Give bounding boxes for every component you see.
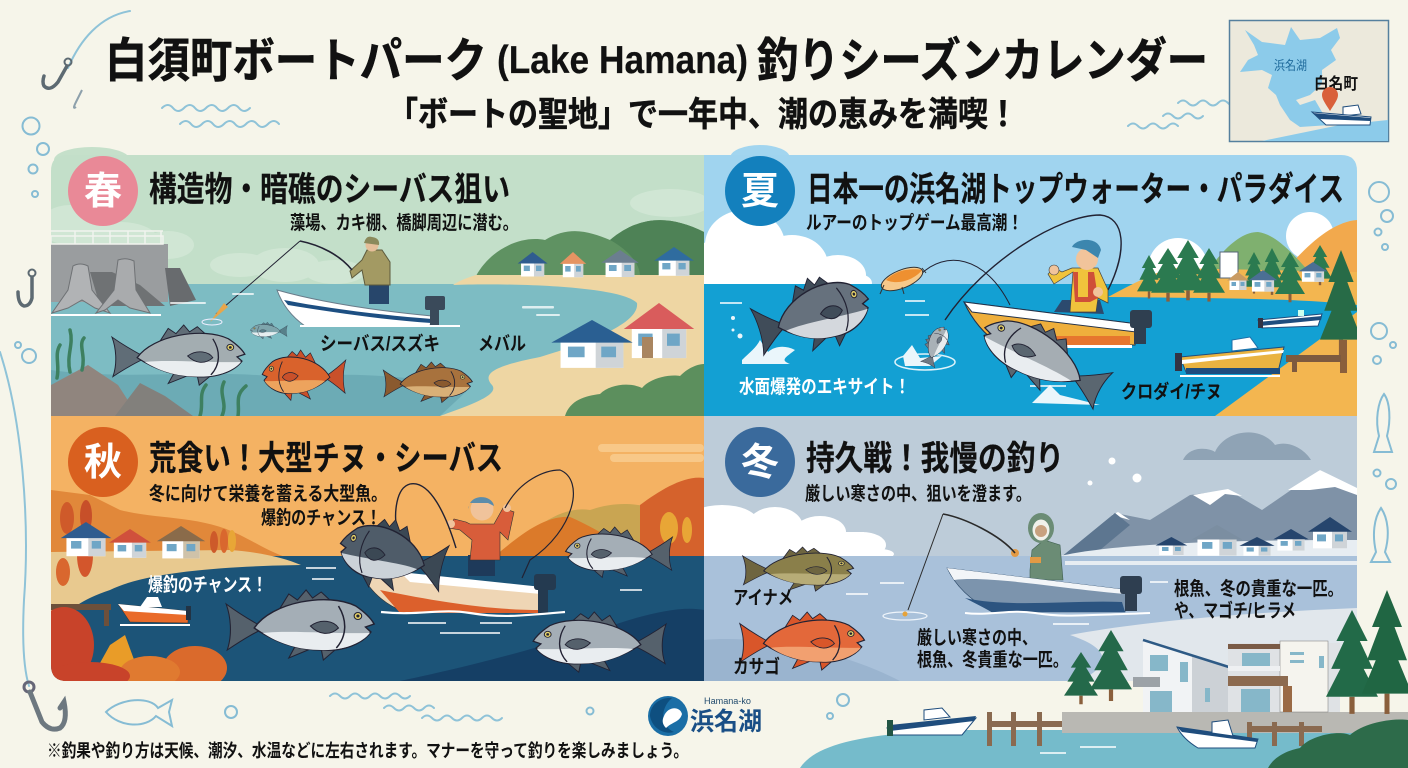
summer small boats	[1175, 310, 1322, 377]
subtitle: 「ボートの聖地」で一年中、潮の恵みを満喫！	[388, 96, 1018, 134]
summer suns	[1150, 212, 1332, 274]
quay	[1062, 712, 1408, 733]
title: 白須町ボートパーク	[105, 34, 487, 87]
spring boat	[277, 290, 460, 327]
winter water	[704, 556, 1357, 681]
spring water	[51, 284, 638, 416]
winter mountains	[1060, 470, 1357, 558]
title: 釣りシーズンカレンダー	[757, 34, 1208, 87]
summer forest	[1137, 240, 1332, 302]
summer small fish	[916, 322, 955, 370]
summer big tree	[1286, 250, 1362, 373]
autumn season badge: 秋	[84, 442, 122, 484]
summer label excite: 水面爆発のエキサイト！	[739, 376, 910, 398]
panel bumps	[54, 145, 790, 173]
map pin	[1322, 87, 1338, 111]
map inset	[1230, 20, 1388, 142]
autumn season badge	[68, 427, 138, 497]
autumn water	[51, 556, 704, 681]
tetrapods	[52, 264, 110, 313]
modern house	[1133, 640, 1340, 712]
logo small text: Hamana-ko	[704, 696, 751, 706]
summer text: ルアーのトップゲーム最高潮！	[806, 212, 1023, 234]
autumn houses	[61, 522, 205, 558]
spring hills	[476, 220, 704, 276]
wave decoration top left	[162, 105, 279, 127]
winter snow field and houses	[1060, 517, 1357, 560]
spring season badge	[68, 156, 138, 226]
bottom water highlights	[1040, 746, 1116, 754]
map label town: 白名町	[1314, 75, 1358, 93]
snow dots	[1088, 458, 1142, 486]
spring bush	[565, 364, 704, 416]
bottom land	[1062, 681, 1408, 768]
autumn foliage foreground	[34, 607, 227, 690]
title: (Lake Hamana)	[497, 39, 748, 82]
map label lake: 浜名湖	[1274, 58, 1307, 73]
logo name: 浜名湖	[690, 708, 762, 736]
winter text centre	[917, 626, 1068, 671]
panel: seasons	[34, 155, 1362, 690]
spring angler	[202, 237, 390, 325]
title	[105, 34, 1208, 87]
winter season badge: 冬	[741, 442, 779, 484]
autumn black sea bream	[333, 509, 452, 602]
waves bottom	[330, 694, 502, 720]
bottom shore scene	[800, 590, 1408, 768]
autumn hills trees right	[660, 512, 692, 544]
spring rockfish	[262, 350, 346, 400]
spring water highlights	[170, 293, 560, 316]
winter text right: 根魚、冬の貴重な一匹。	[1174, 577, 1343, 600]
winter text: 厳しい寒さの中、狙いを澄ます。	[805, 482, 1031, 505]
summer town	[1220, 252, 1327, 292]
winter label kasago: カサゴ	[733, 655, 780, 678]
spring brown rockfish	[383, 362, 472, 403]
autumn angler	[396, 470, 573, 578]
spring clouds	[40, 189, 710, 284]
winter label ainame: アイナメ	[733, 588, 793, 609]
summer water	[704, 284, 1357, 416]
panel: autumn	[34, 416, 704, 690]
summer splash left	[731, 316, 795, 364]
fish outline right lower	[1371, 508, 1390, 562]
map boat	[1312, 105, 1371, 125]
spring label sea bass: シーバス/スズキ	[320, 332, 440, 355]
autumn text line 1: 冬に向けて栄養を蓄える大型魚。	[149, 482, 387, 505]
fishing line and hook, top left	[43, 11, 130, 108]
summer cloud	[704, 212, 872, 284]
autumn hills left	[51, 490, 295, 570]
spring text: 藻場、カキ棚、橋脚周辺に潜む。	[290, 212, 518, 234]
bubbles right	[1369, 182, 1396, 489]
dock left	[987, 712, 1062, 746]
panel: summer	[694, 155, 1362, 418]
spring seaweed	[57, 330, 246, 416]
summer black sea bream	[747, 264, 878, 366]
bottom bush	[1268, 720, 1408, 768]
fish outline bottom left	[106, 700, 172, 726]
spring label mebaru: メバル	[478, 333, 526, 355]
autumn heading: 荒食い！大型チヌ・シーバス	[149, 440, 503, 478]
summer hills	[1214, 220, 1357, 272]
summer rod and line	[920, 215, 1121, 320]
panel: winter	[686, 416, 1357, 681]
autumn clouds	[598, 444, 704, 462]
summer water highlights	[720, 300, 1066, 387]
spring far houses	[518, 247, 694, 277]
bottom water	[800, 730, 1408, 768]
long line with big hook	[0, 352, 65, 729]
spring season badge: 春	[84, 171, 122, 213]
spring bait fish	[250, 322, 287, 339]
winter grey cloud	[1183, 432, 1311, 460]
winter boat	[947, 568, 1150, 616]
winter cloud left	[686, 505, 894, 559]
summer land	[1108, 268, 1357, 305]
winter text centre: 厳しい寒さの中、	[917, 626, 1037, 649]
winter angler	[883, 513, 1063, 620]
autumn dock	[51, 604, 111, 626]
autumn text line 2: 爆釣のチャンス！	[261, 507, 381, 529]
spring sand	[440, 275, 704, 416]
summer sea bass	[970, 300, 1118, 418]
autumn trees	[56, 500, 236, 586]
winter text centre: 根魚、冬貴重な一匹。	[917, 648, 1068, 671]
shore trees	[1064, 590, 1408, 714]
spring heading: 構造物・暗礁のシーバス狙い	[149, 171, 510, 209]
spring near houses	[551, 303, 694, 368]
summer splash centre	[895, 345, 955, 370]
bubbles bottom	[225, 694, 849, 719]
summer boat	[964, 302, 1152, 348]
autumn sea bass lower left	[226, 590, 374, 660]
winter text right: や、マゴチ/ヒラメ	[1174, 599, 1296, 622]
winter ainame	[743, 547, 854, 591]
winter heading: 持久戦！我慢の釣り	[806, 440, 1064, 478]
boat left	[887, 708, 976, 736]
dock right	[1247, 722, 1322, 746]
autumn water label: 爆釣のチャンス！	[148, 574, 267, 596]
fish outline right upper	[1374, 394, 1392, 452]
summer label kurodai: クロダイ/チヌ	[1121, 380, 1222, 403]
autumn sea bass upper right	[566, 527, 672, 577]
wave decoration top right	[1128, 100, 1238, 128]
summer angler	[1048, 240, 1108, 314]
bubbles left	[15, 118, 49, 363]
winter season badge	[725, 427, 795, 497]
winter text right	[1174, 577, 1343, 622]
sea in map	[1262, 120, 1388, 141]
logo mark	[648, 696, 688, 736]
summer season badge	[725, 156, 795, 226]
seawall	[51, 231, 196, 316]
autumn small boat	[118, 597, 191, 626]
autumn boat	[360, 570, 565, 616]
autumn shore	[51, 550, 301, 620]
winter water highlights	[846, 581, 1168, 625]
panel: spring	[40, 155, 710, 416]
logo	[648, 696, 762, 736]
autumn hills right	[495, 478, 704, 560]
autumn sea bass lower right	[533, 612, 666, 672]
hook left middle	[18, 270, 36, 306]
boat right	[1177, 720, 1258, 748]
autumn water highlights	[306, 567, 642, 634]
summer splash right	[1032, 385, 1100, 405]
spring rocks	[51, 365, 193, 416]
summer season badge: 夏	[741, 171, 779, 213]
lake shape	[1240, 27, 1340, 127]
winter kasago	[740, 612, 864, 670]
summer lure	[880, 266, 926, 294]
spring sea bass	[112, 325, 245, 385]
footnote: ※釣果や釣り方は天候、潮汐、水温などに左右されます。マナーを守って釣りを楽しみましょう。	[47, 740, 688, 761]
